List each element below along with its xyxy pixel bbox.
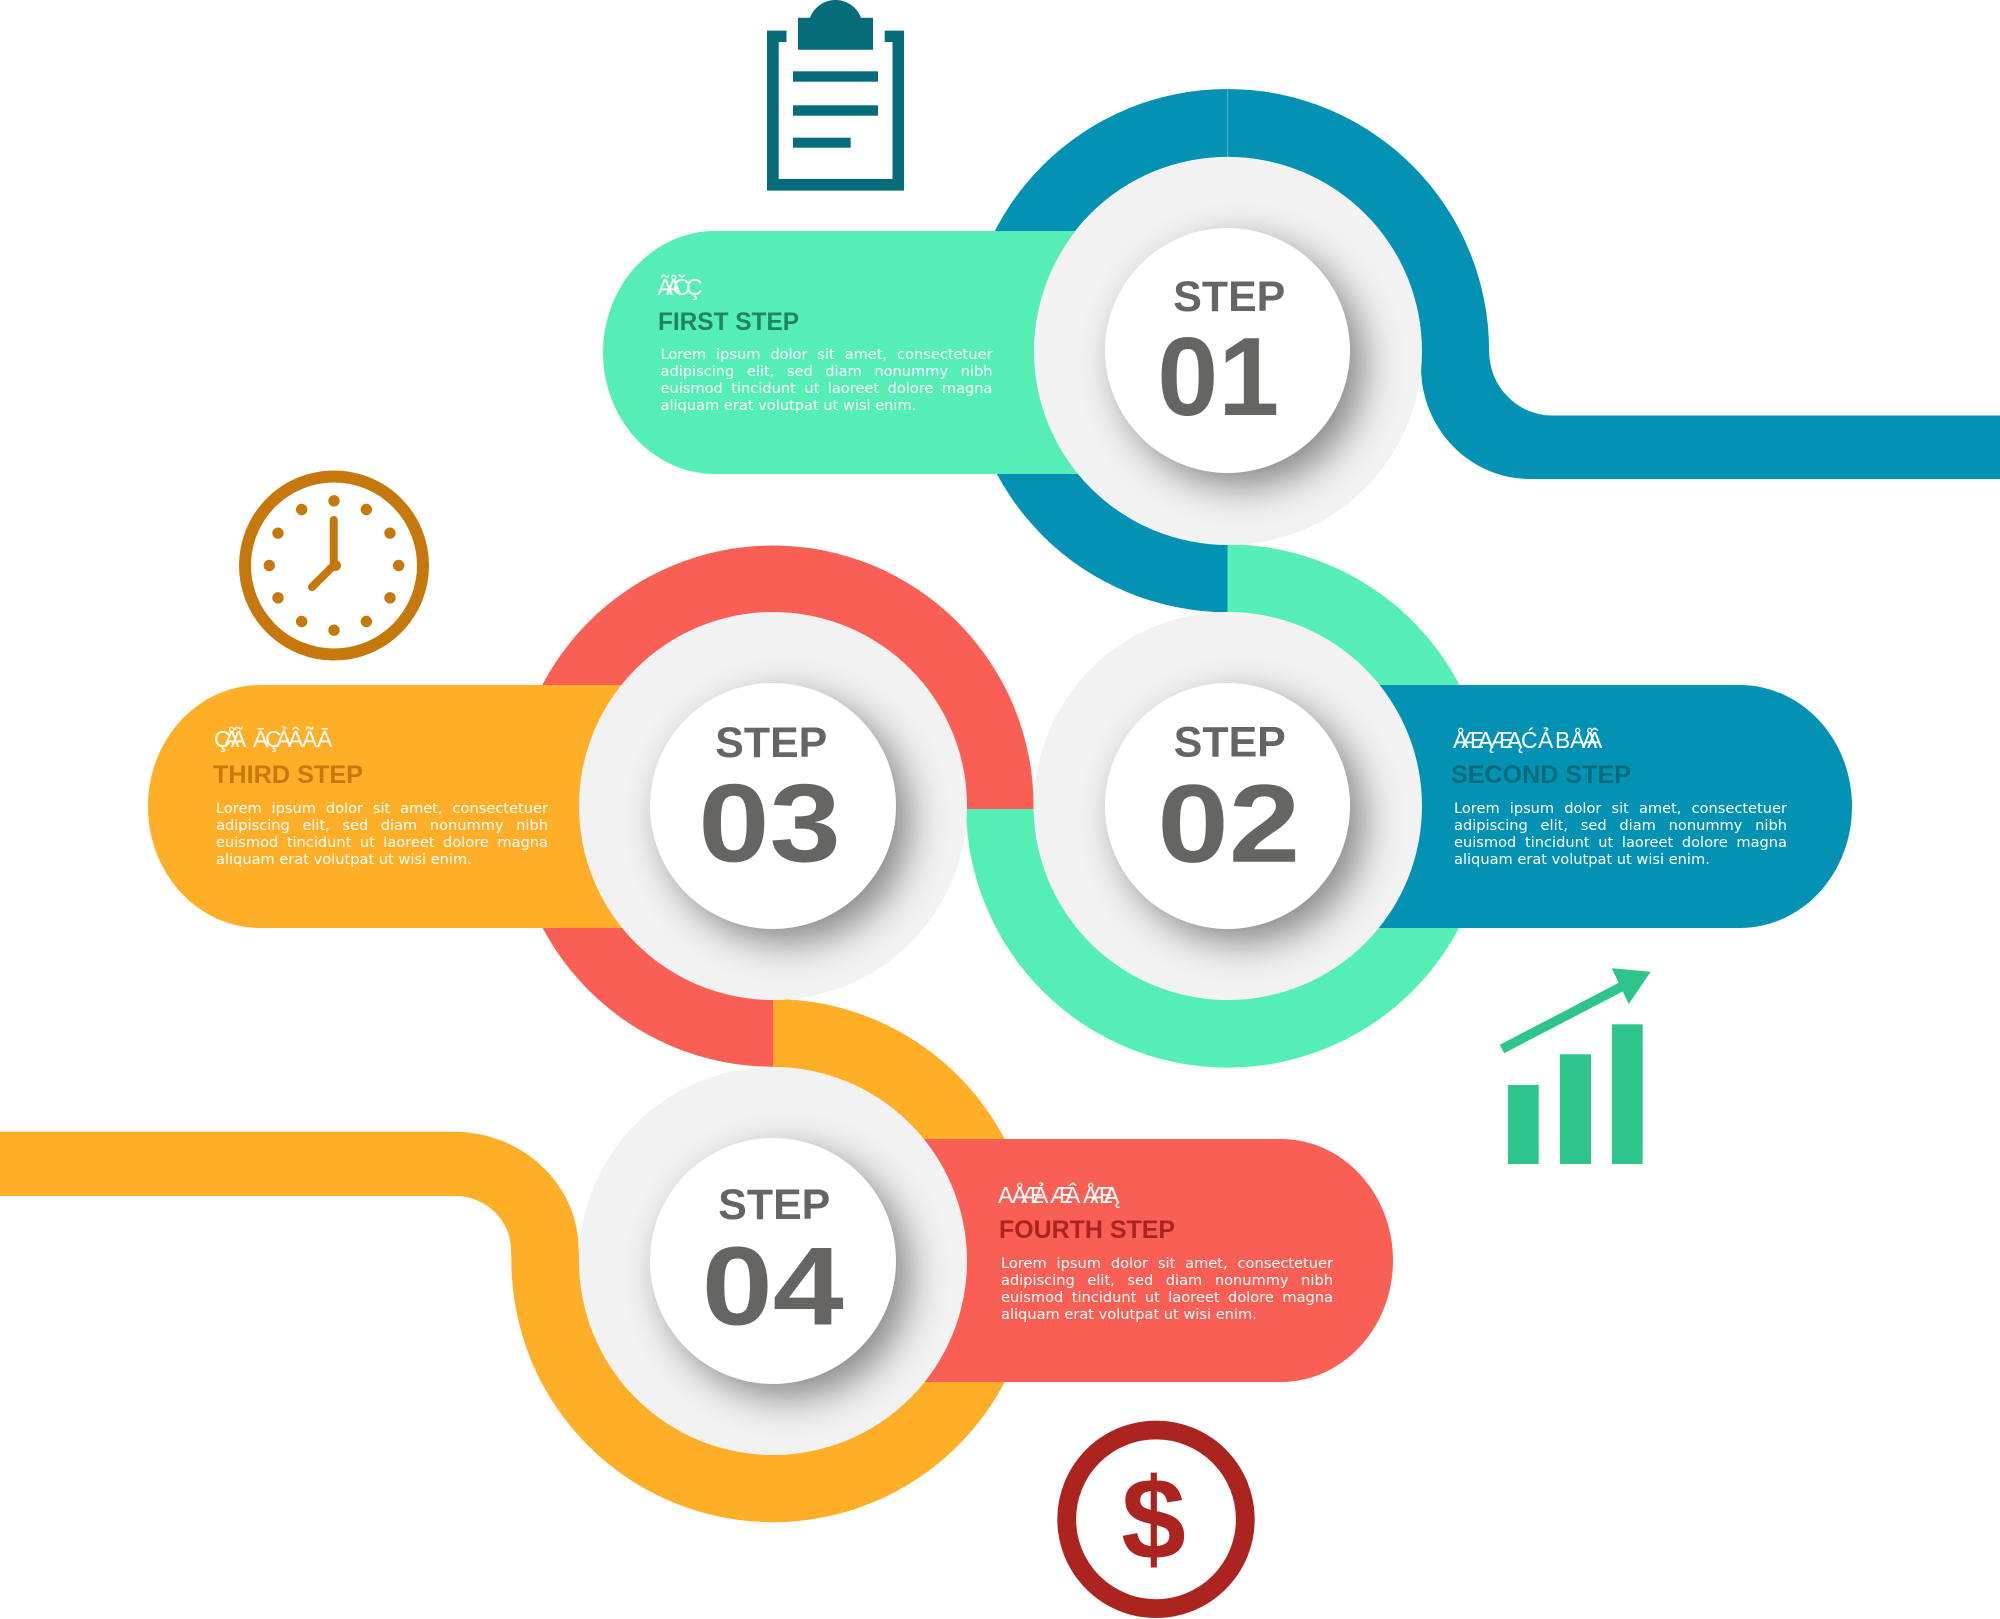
step 01 label and number: 01: [1157, 315, 1279, 439]
third step body text: euismod tincidunt ut laoreet dolore magna: [216, 834, 548, 851]
red ring around step 3: [512, 545, 1034, 1067]
third step heading: THIRD STEP: [213, 761, 363, 789]
second step body text: euismod tincidunt ut laoreet dolore magna: [1454, 834, 1787, 851]
step 04 label and number: STEP: [718, 1181, 830, 1229]
step 03 label and number: STEP: [715, 719, 827, 767]
step 04 label and number: [702, 1181, 844, 1348]
fourth step body text: euismod tincidunt ut laoreet dolore magna: [1001, 1289, 1333, 1306]
second step body text: [1454, 800, 1787, 868]
blue ring around step 1 with line to right edge: [966, 89, 2000, 612]
step 03 label and number: 03: [698, 761, 841, 885]
icon: clock: [239, 470, 429, 660]
fourth step body text: Lorem ipsum dolor sit amet, consectetuer: [1001, 1255, 1333, 1272]
third step body text: adipiscing elit, sed diam nonummy nibh: [216, 817, 548, 834]
second step heading: SECOND STEP: [1451, 761, 1631, 789]
fourth step body text: [1001, 1255, 1333, 1323]
first step heading: FIRST STEP: [658, 308, 798, 336]
fourth step body text: aliquam erat volutpat ut wisi enim.: [1001, 1306, 1257, 1323]
step 02 badge: [1034, 612, 1422, 1000]
third step garbled title: ÇÅÃĀÇẢÂÃĀ: [214, 724, 333, 752]
panel: third step: [148, 685, 773, 928]
second step body text: adipiscing elit, sed diam nonummy nibh: [1454, 817, 1787, 834]
fourth step heading: FOURTH STEP: [999, 1216, 1175, 1244]
first step garbled title: ÃÅČÇ: [658, 273, 703, 300]
second step garbled title: ÅÆĄÆĄĆẢBÅÅÂ: [1453, 725, 1603, 753]
green ring around step 2: [966, 544, 1489, 1068]
first step body text: euismod tincidunt ut laoreet dolore magna: [660, 380, 992, 397]
first step body text: [660, 346, 992, 414]
step 02 label and number: 02: [1157, 762, 1300, 886]
third step body text: [216, 800, 548, 868]
step 02 label and number: [1157, 719, 1300, 886]
first step body text: adipiscing elit, sed diam nonummy nibh: [660, 363, 992, 380]
orange ring around step 4 with line to left edge: [0, 999, 1035, 1522]
first step body text: Lorem ipsum dolor sit amet, consectetuer: [660, 346, 992, 363]
second step body text: Lorem ipsum dolor sit amet, consectetuer: [1454, 800, 1787, 817]
first step body text: aliquam erat volutpat ut wisi enim.: [660, 397, 916, 414]
third step body text: Lorem ipsum dolor sit amet, consectetuer: [216, 800, 548, 817]
icon: dollar coin: [1057, 1420, 1255, 1618]
third step body text: aliquam erat volutpat ut wisi enim.: [216, 851, 472, 868]
step 02 label and number: STEP: [1173, 719, 1285, 767]
step 04 label and number: 04: [702, 1224, 844, 1348]
second step body text: aliquam erat volutpat ut wisi enim.: [1454, 851, 1710, 868]
panel: fourth step: [773, 1139, 1393, 1382]
fourth step body text: adipiscing elit, sed diam nonummy nibh: [1001, 1272, 1333, 1289]
panel: second step: [1227, 685, 1852, 928]
step 04 badge: [579, 1067, 967, 1455]
fourth step garbled title: AÅÆẢÆÂÅÆĄ: [998, 1180, 1120, 1208]
step 01 label and number: STEP: [1173, 273, 1285, 321]
step 03 label and number: [698, 719, 841, 885]
icon: dollar coin: $: [1121, 1454, 1186, 1584]
icon: bar chart with arrow: [1500, 968, 1651, 1164]
step 01 badge: [1034, 157, 1422, 545]
icon: clipboard: [767, 0, 904, 191]
step 03 badge: [579, 612, 967, 1000]
panel: first step: [602, 231, 1228, 474]
